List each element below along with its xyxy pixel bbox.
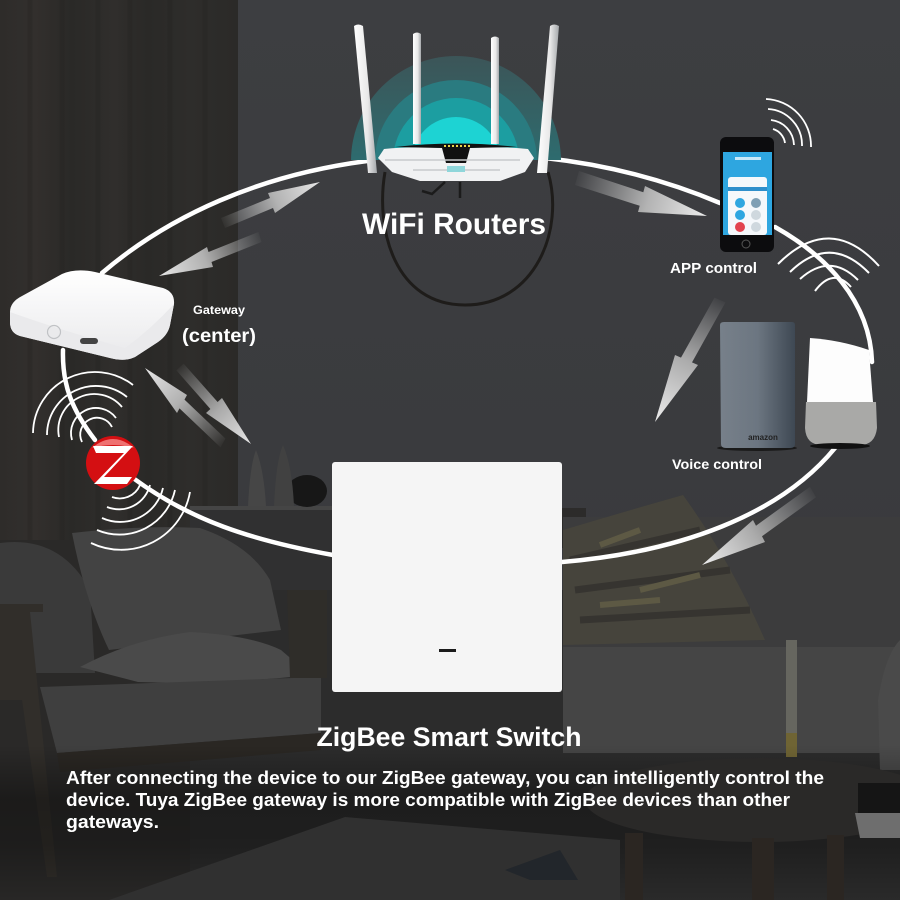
label: Voice control: Voice control [672,456,762,472]
arrows between devices [145,171,816,565]
icon: Google Home speaker [805,338,877,449]
label: center: (center) [182,326,256,347]
heading: ZigBee Smart Switch: ZigBee Smart Switch [316,722,582,752]
arrow: router to gateway [221,182,320,228]
arrow: phone to speakers [655,298,726,422]
text block: description [66,768,824,832]
text block: description: device. Tuya ZigBee gateway is more compatible with ZigBee devices than other [66,790,790,810]
left armchair [0,542,95,673]
arrow: switch to gateway [145,368,226,447]
text backdrop shadow [0,745,900,900]
vases [287,475,327,507]
icon: phone wireless signal [766,99,811,147]
label: APP control: APP control [670,261,757,277]
panel: ZigBee smart switch [332,462,562,692]
icon: WiFi router [351,24,561,198]
patterned pillow [563,495,765,645]
arrow: gateway to switch [176,364,251,444]
table and accessories [786,640,797,735]
right sofa [563,517,900,657]
icon: Amazon Echo speaker [717,322,797,451]
icon: gateway hub [10,270,174,360]
icon: ZigBee logo [86,436,140,490]
arrow: router to phone [575,171,707,216]
arrow: speakers to switch [702,487,816,565]
icon: ZigBee signal upper [33,372,133,442]
text block: description: gateways. [66,812,159,832]
icon: speaker wireless signal [778,238,879,291]
label: Gateway: Gateway [193,305,246,317]
arrow: gateway to router [159,232,262,276]
icon: ZigBee signal lower [91,485,190,550]
router power cable [383,172,553,305]
connection ring [63,158,872,562]
text block: description: After connecting the device to our ZigBee gateway, you can intelligently control the [66,768,824,788]
heading: WiFi Routers: WiFi Routers [362,208,546,241]
icon: smartphone [720,137,774,252]
icon: Amazon Echo speaker: amazon [748,433,778,442]
